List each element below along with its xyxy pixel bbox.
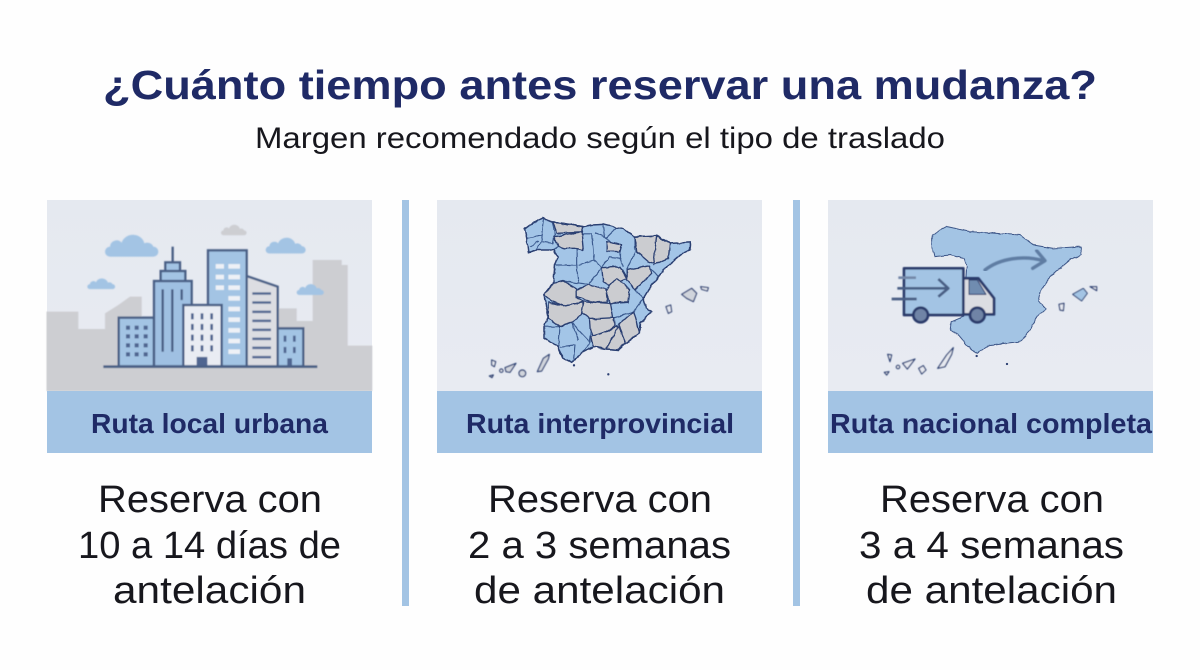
label band xyxy=(437,391,762,453)
panel: ruta nacional completa xyxy=(828,200,1153,453)
text: plazo ruta local xyxy=(78,479,341,612)
label band xyxy=(828,391,1153,453)
text: plazo ruta interprovincial xyxy=(468,479,731,612)
text: plazo ruta local: antelación xyxy=(113,570,306,612)
text: plazo ruta interprovincial: 2 a 3 semanas xyxy=(468,525,731,567)
text: plazo ruta interprovincial: Reserva con xyxy=(488,479,712,521)
panel background xyxy=(828,200,1153,391)
text: plazo ruta nacional: Reserva con xyxy=(880,479,1104,521)
panel: ruta interprovincial xyxy=(437,200,762,453)
label: Ruta local urbana xyxy=(91,408,329,439)
text: plazo ruta nacional: 3 a 4 semanas xyxy=(859,525,1124,567)
label band xyxy=(47,391,372,453)
text: plazo ruta local: 10 a 14 días de xyxy=(78,525,341,567)
panel background xyxy=(47,200,372,391)
title: ¿Cuánto tiempo antes reservar una mudanza? xyxy=(103,62,1097,108)
divider right xyxy=(793,200,800,606)
icon: truck xyxy=(892,268,994,322)
text: plazo ruta interprovincial: de antelación xyxy=(474,570,725,612)
subtitle: Margen recomendado según el tipo de traslado xyxy=(255,122,945,155)
icon: route arrow xyxy=(985,251,1045,270)
divider left xyxy=(402,200,409,606)
panel: ruta local urbana xyxy=(47,200,372,453)
text: plazo ruta nacional: de antelación xyxy=(866,570,1117,612)
text: plazo ruta nacional xyxy=(859,479,1124,612)
label: Ruta nacional completa xyxy=(830,408,1153,439)
illustration: city skyline xyxy=(47,225,372,391)
illustration: truck over map of Spain xyxy=(884,227,1097,375)
text: plazo ruta local: Reserva con xyxy=(98,479,322,521)
label: Ruta interprovincial xyxy=(466,408,734,439)
illustration: provincial map of Spain xyxy=(489,218,708,378)
panel background xyxy=(437,200,762,391)
